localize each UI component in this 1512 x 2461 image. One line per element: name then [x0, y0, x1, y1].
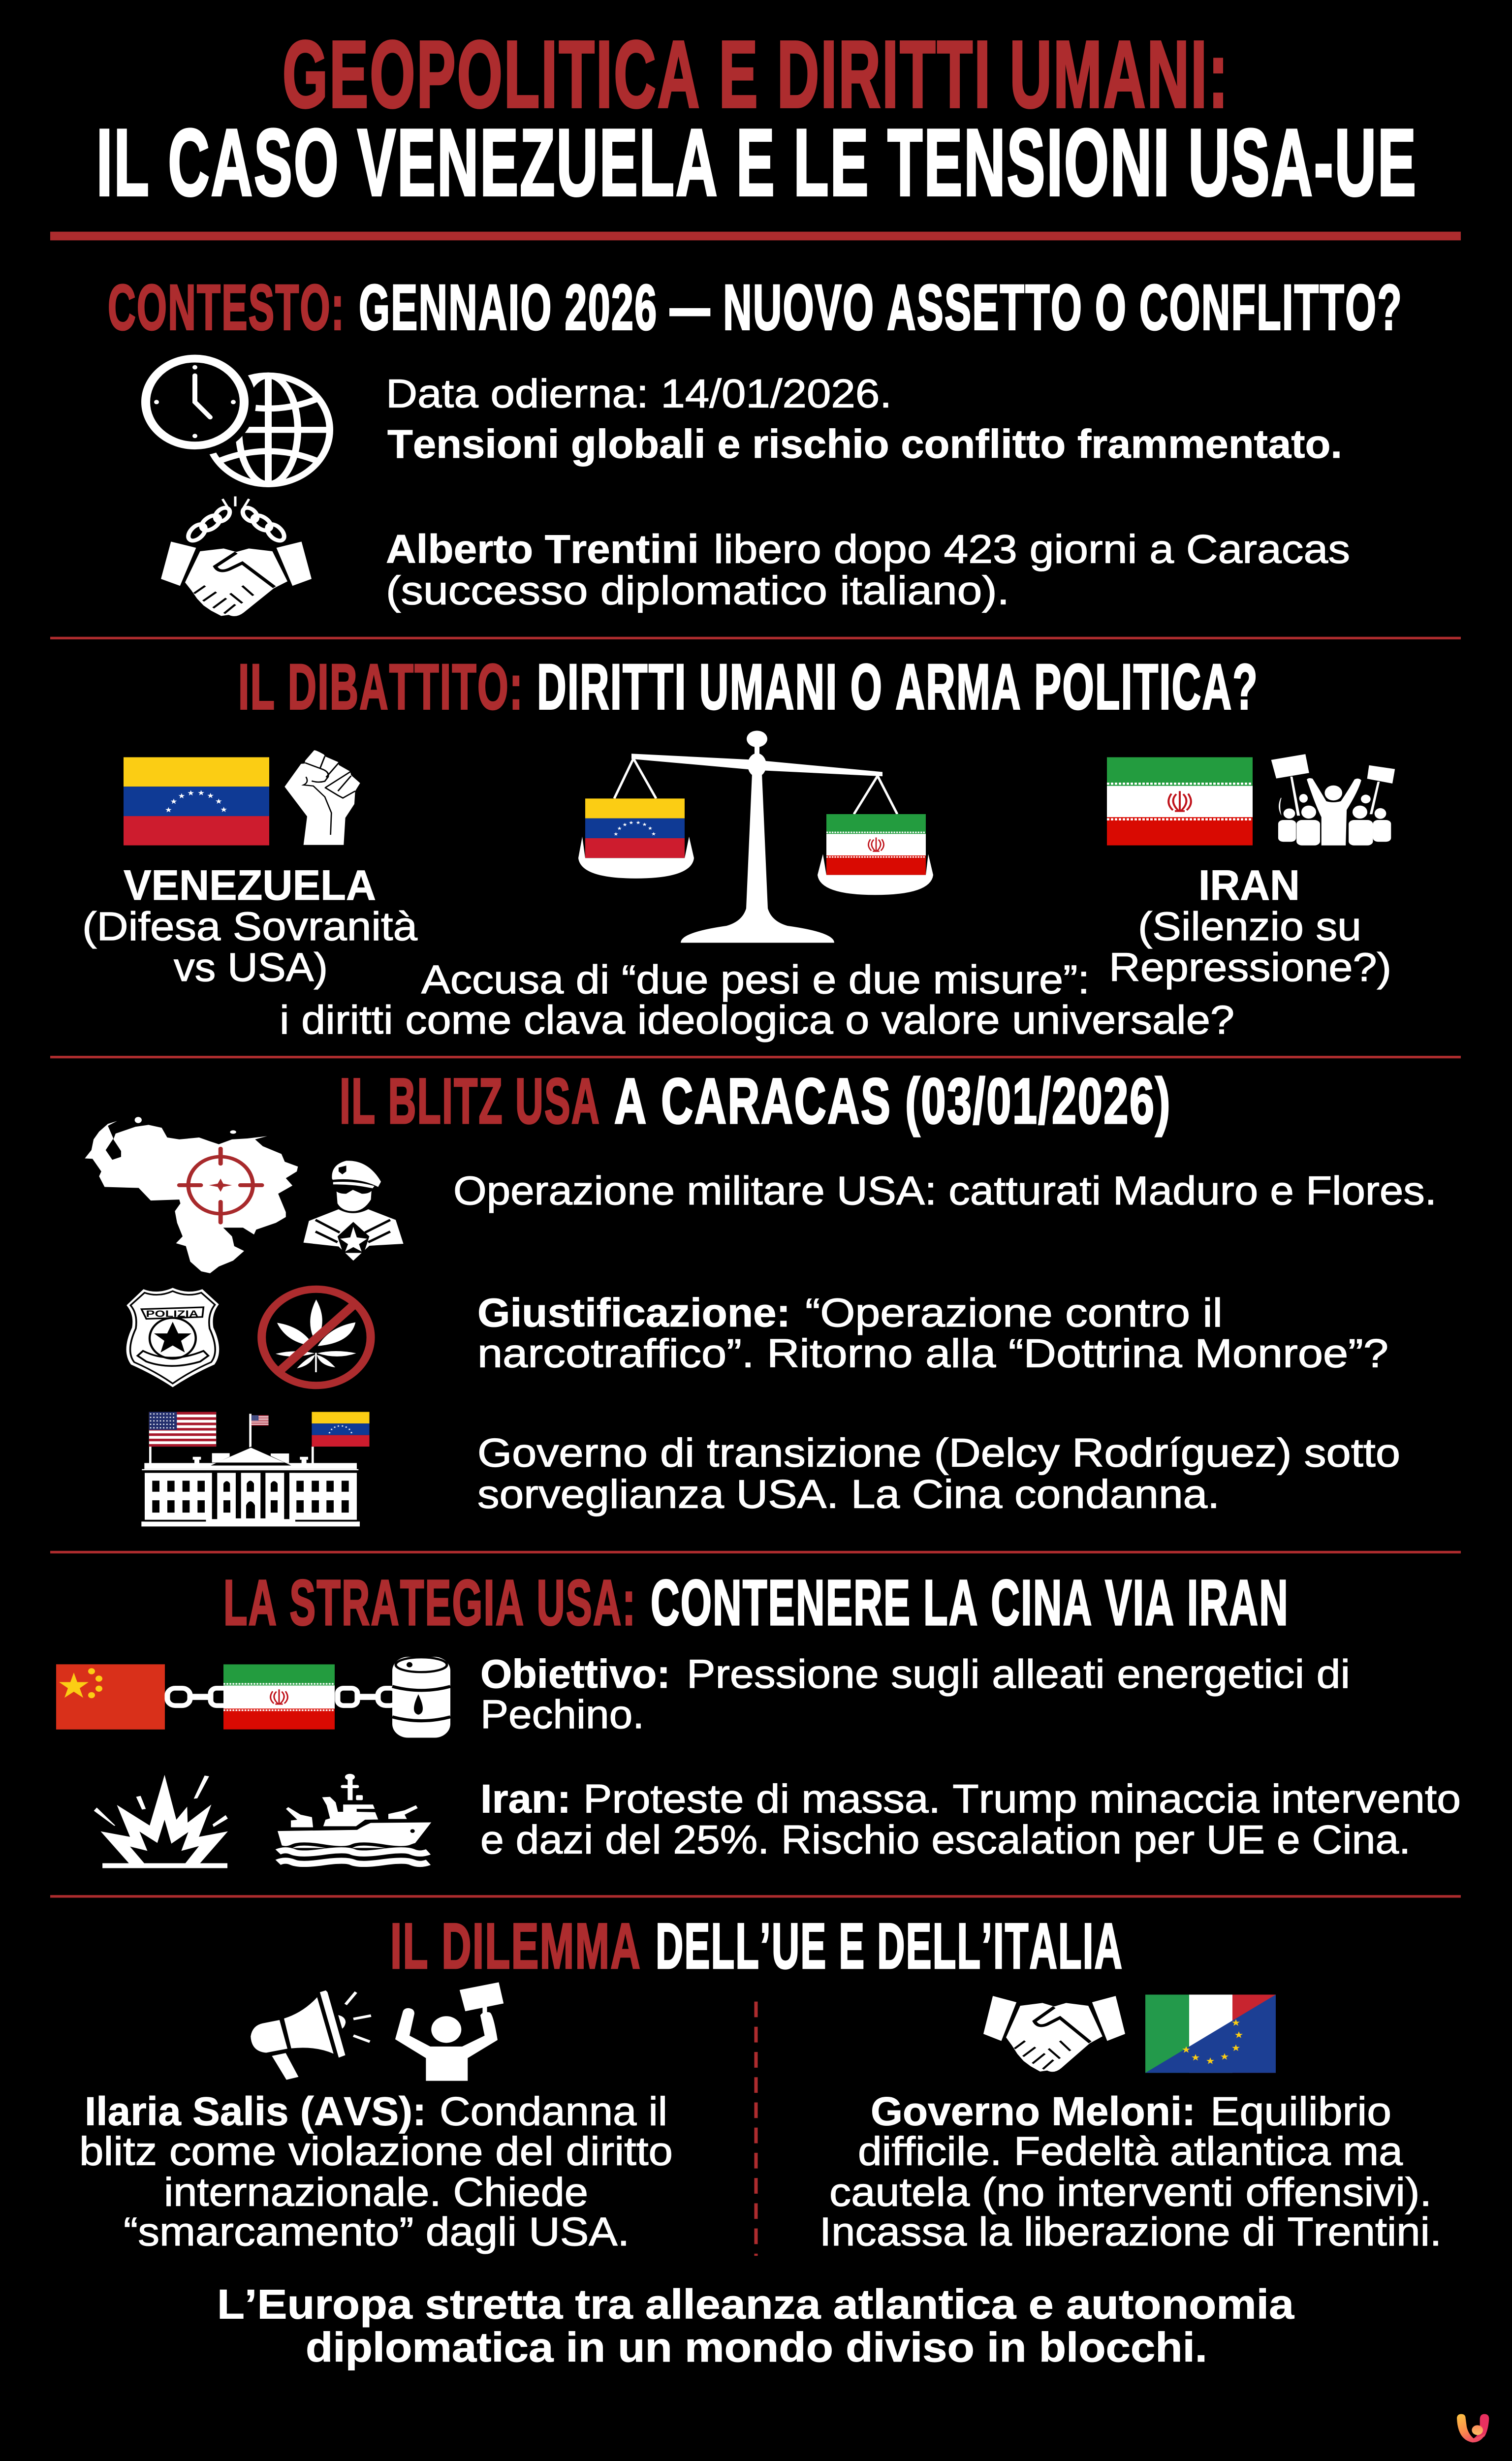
panel: la strategia usa	[56, 1567, 1461, 1868]
icon: venezuela map with target	[85, 1117, 298, 1273]
conclusion text: L’Europa stretta tra alleanza atlantica e autonomia	[217, 2281, 1294, 2328]
panel: il blitz usa	[85, 1065, 1437, 1526]
icon: soldier	[303, 1161, 404, 1261]
icon: logo	[1457, 2414, 1489, 2442]
text: governo meloni: difficile. Fedeltà atlantica ma	[858, 2129, 1403, 2174]
text: ilaria salis: Condanna il	[440, 2089, 667, 2134]
conclusion text	[217, 2281, 1294, 2370]
heading: contesto: CONTESTO:	[108, 271, 345, 343]
text: giustificazione: Giustificazione:	[477, 1291, 790, 1335]
label: iran	[1109, 861, 1391, 990]
heading: il blitz usa	[340, 1065, 1171, 1137]
label: venezuela: VENEZUELA	[124, 861, 376, 909]
text: due pesi e due misure: i diritti come clava ideologica o valore universale?	[280, 998, 1234, 1042]
flag: iran	[223, 1664, 335, 1730]
heading: il dilemma	[390, 1910, 1123, 1982]
text: giustificazione	[477, 1291, 1388, 1376]
panel: contesto	[108, 271, 1403, 616]
text: iran proteste: Proteste di massa. Trump minaccia intervento	[583, 1776, 1461, 1821]
text: governo meloni: Governo Meloni:	[871, 2089, 1196, 2134]
text: governo di transizione: sorveglianza USA. La Cina condanna.	[477, 1472, 1220, 1516]
text: obiettivo	[480, 1652, 1350, 1737]
text: due pesi e due misure: Accusa di “due pesi e due misure”:	[421, 957, 1090, 1002]
icon: scales with flags	[578, 730, 933, 943]
icon: handshake	[983, 1996, 1125, 2072]
text: obiettivo: Pechino.	[480, 1692, 644, 1737]
heading: il blitz usa: A CARACAS (03/01/2026)	[614, 1065, 1171, 1137]
text: giustificazione: narcotraffico”. Ritorno alla “Dottrina Monroe”?	[477, 1331, 1388, 1376]
text: ilaria salis: blitz come violazione del diritto	[79, 2129, 673, 2174]
icon: china iran oil chain	[56, 1657, 450, 1738]
icon: warship	[278, 1774, 432, 1864]
text: operazione militare: Operazione militare USA: catturati Maduro e Flores.	[453, 1168, 1437, 1213]
text: governo di transizione: Governo di transizione (Delcy Rodríguez) sotto	[477, 1430, 1400, 1475]
title	[96, 21, 1418, 216]
flag: iran	[1107, 757, 1253, 846]
text: ilaria salis: “smarcamento” dagli USA.	[124, 2209, 630, 2254]
label: iran: IRAN	[1198, 861, 1300, 909]
text: governo meloni: Incassa la liberazione di Trentini.	[819, 2209, 1442, 2254]
icon: explosion	[94, 1775, 228, 1868]
label: venezuela: (Difesa Sovranità	[82, 904, 418, 949]
text: iran proteste: e dazi del 25%. Rischio escalation per UE e Cina.	[480, 1817, 1411, 1862]
text: governo meloni	[819, 2089, 1442, 2254]
text: governo meloni: cautela (no interventi offensivi).	[829, 2170, 1432, 2214]
heading: il dibattito	[238, 651, 1259, 723]
label: iran: (Silenzio su	[1138, 904, 1361, 949]
conclusion text: diplomatica in un mondo diviso in blocchi.	[306, 2324, 1207, 2370]
label: iran: Repressione?)	[1109, 945, 1391, 990]
text: giustificazione: “Operazione contro il	[805, 1291, 1223, 1335]
text: alberto trentini: Alberto Trentini	[386, 527, 699, 571]
heading: la strategia usa: LA STRATEGIA USA:	[223, 1567, 636, 1639]
text: data odierna	[386, 371, 1342, 467]
flag: china	[56, 1664, 165, 1730]
text: obiettivo: Pressione sugli alleati energetici di	[687, 1652, 1350, 1697]
icon: raised fist	[284, 750, 360, 845]
icon: oil barrel	[392, 1657, 450, 1738]
icon: police badge: POLIZIA	[146, 1309, 199, 1319]
icon: broken chains and handshake	[161, 496, 312, 616]
icon: clock and globe	[134, 348, 330, 484]
text: due pesi e due misure	[280, 957, 1234, 1042]
text: ilaria salis: internazionale. Chiede	[164, 2170, 588, 2214]
text: alberto trentini: (successo diplomatico italiano).	[386, 568, 1009, 613]
text: obiettivo: Obiettivo:	[480, 1652, 670, 1697]
flag: venezuela	[124, 757, 269, 846]
text: ilaria salis	[79, 2089, 673, 2254]
text: data odierna: Tensioni globali e rischio conflitto frammentato.	[387, 422, 1342, 467]
heading: il dilemma: IL DILEMMA	[390, 1910, 641, 1982]
text: iran proteste	[480, 1776, 1461, 1862]
heading: il dibattito: IL DIBATTITO:	[238, 651, 524, 723]
icon: prohibited cannabis leaf	[262, 1289, 371, 1386]
panel: il dibattito	[82, 651, 1395, 1042]
flag: italy and eu	[1145, 1994, 1276, 2073]
panel: il dilemma	[79, 1910, 1442, 2256]
icon: megaphone	[251, 1990, 371, 2080]
text: alberto trentini	[386, 527, 1350, 613]
icon: white house with flags	[141, 1412, 370, 1526]
label: venezuela: vs USA)	[174, 945, 328, 990]
text: governo meloni: Equilibrio	[1210, 2089, 1391, 2134]
icon: protester with sign	[395, 1982, 504, 2081]
text: alberto trentini: libero dopo 423 giorni a Caracas	[714, 527, 1350, 571]
label: venezuela	[82, 861, 418, 990]
text: ilaria salis: Ilaria Salis (AVS):	[85, 2089, 426, 2134]
icon: protest crowd	[1271, 754, 1395, 846]
icon: police badge	[126, 1288, 219, 1387]
text: data odierna: Data odierna: 14/01/2026.	[386, 371, 892, 416]
text: iran proteste: Iran:	[480, 1776, 571, 1821]
heading: il blitz usa: IL BLITZ USA	[340, 1065, 600, 1137]
text: governo di transizione	[477, 1430, 1400, 1516]
